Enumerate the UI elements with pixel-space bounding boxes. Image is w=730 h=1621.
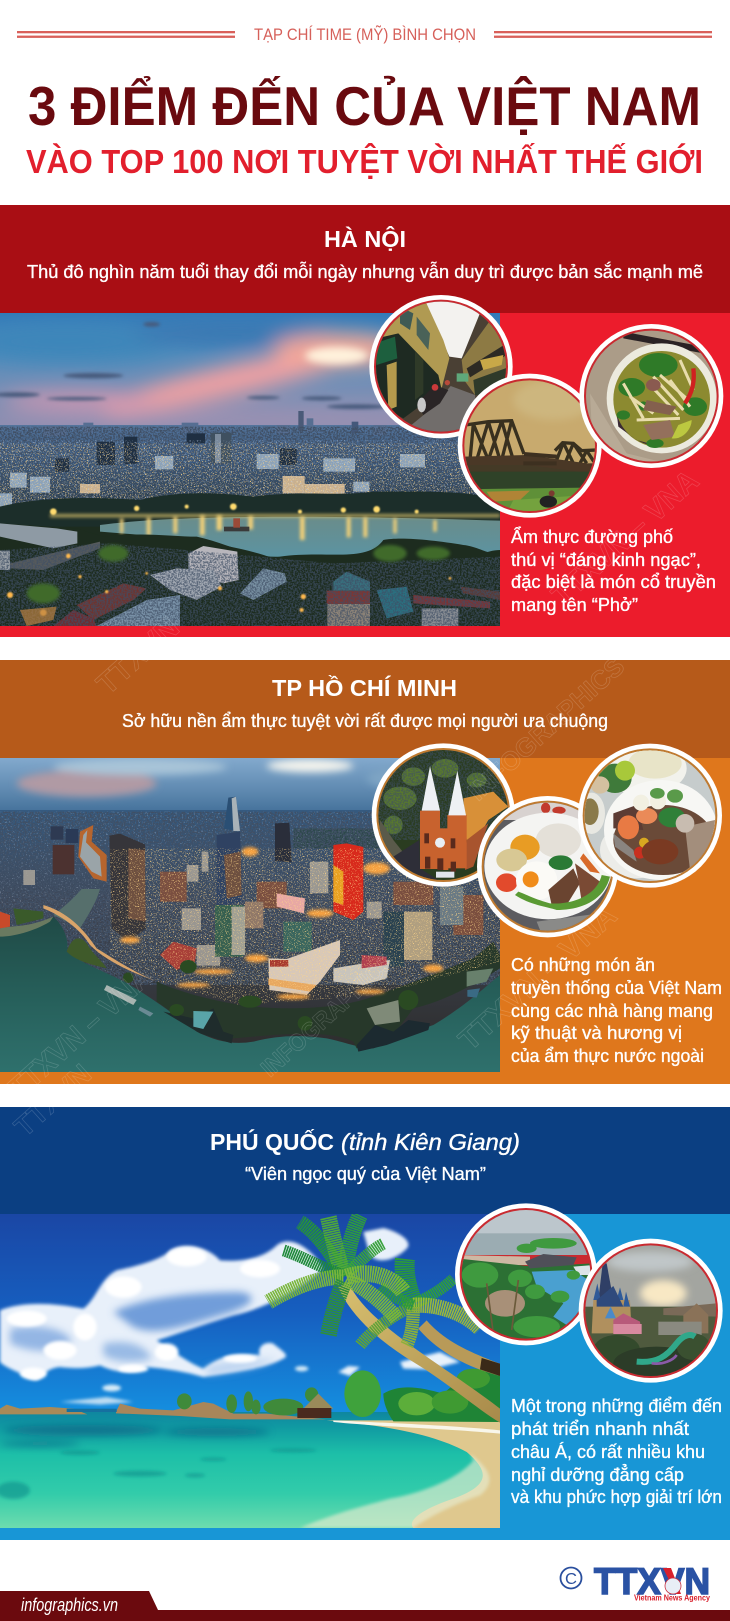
- body text: Phú Quốc description: [511, 1396, 722, 1507]
- tagline: TP Hồ Chí Minh: Sở hữu nền ẩm thực tuyệt vời rất được mọi người ưa chuộng: [122, 710, 608, 731]
- header band: Phú Quốc: [0, 1107, 730, 1214]
- panel: TP Hồ Chí Minh: [0, 660, 730, 1084]
- tagline: Hà Nội: Thủ đô nghìn năm tuổi thay đổi mỗi ngày nhưng vẫn duy trì được bản sắc mạnh mẽ: [27, 261, 703, 282]
- small islets trees: [177, 1387, 318, 1415]
- watermarks: TTXVN: [91, 611, 186, 701]
- distant rocks: [0, 1405, 87, 1414]
- circle photo: resort with pool: [455, 1203, 600, 1347]
- colonial hotel: [268, 940, 340, 995]
- red hotel tower: [333, 843, 363, 920]
- header band: TP Hồ Chí Minh: [0, 660, 730, 758]
- sea: [0, 1412, 500, 1529]
- watermarks: INFOGRAPHICS: [256, 949, 400, 1082]
- distant city: [0, 425, 500, 505]
- logo: TTXVN Vietnam News Agency: TTXVN: [594, 1561, 710, 1602]
- heading: TP Hồ Chí Minh: TP HỒ CHÍ MINH: [272, 674, 457, 701]
- body text: Hà Nội street food: [511, 526, 716, 615]
- footer bar with site name: [0, 1591, 730, 1621]
- watermarks: TTXVN – VNA: [453, 899, 623, 1057]
- body text: TP Hồ Chí Minh cuisine: kỹ thuật và hương vị: [511, 1023, 682, 1043]
- shore trees: [344, 1370, 381, 1417]
- circle photo: Notre-Dame cathedral Saigon: [370, 740, 520, 890]
- body text: Phú Quốc description: Một trong những điểm đến: [511, 1396, 722, 1416]
- watermarks: TTXVN – VNA: [3, 960, 158, 1105]
- circle photo: Long Bien bridge: [458, 374, 603, 520]
- side panel: TP Hồ Chí Minh: [0, 758, 730, 1084]
- photo: aerial Ho Chi Minh City skyline and river: [0, 755, 500, 1075]
- beach hut: [303, 1394, 333, 1409]
- body text: Hà Nội street food: thú vị “đáng kinh ngạc”,: [511, 549, 701, 570]
- watermarks: [3, 464, 705, 1142]
- heading: Phú Quốc: [210, 1128, 520, 1155]
- palm fronds: rear crown: [360, 1259, 480, 1345]
- body text: Hà Nội street food: mang tên “Phở”: [511, 594, 638, 615]
- watermarks: TTXVN – VNA: [546, 464, 705, 612]
- palm trunks: [418, 1320, 500, 1376]
- watermarks: TTXVN: [8, 1058, 97, 1142]
- city blocks: [23, 852, 382, 966]
- body text: Phú Quốc description: phát triển nhanh nhất: [511, 1419, 689, 1439]
- body text: TP Hồ Chí Minh cuisine: cùng các nhà hàng mang: [511, 1001, 713, 1021]
- beach: [327, 1420, 500, 1528]
- tagline: Phú Quốc: “Viên ngọc quý của Việt Nam”: [245, 1163, 486, 1184]
- circle photo: broken rice plate: [477, 795, 620, 938]
- circle photo: amusement park castle: [579, 1239, 723, 1383]
- body text: Phú Quốc description: và khu phức hợp giải trí lớn: [511, 1487, 722, 1507]
- circle photo: Hanoi old quarter street: [367, 293, 517, 443]
- water: [0, 917, 500, 1075]
- photo: Hanoi skyline at dusk over Hoan Kiem lake: [0, 310, 500, 630]
- heading: Hà Nội: HÀ NỘI: [324, 225, 406, 252]
- panel: Phú Quốc: [0, 1107, 730, 1540]
- circle photo: hu tieu noodle bowl: [577, 742, 723, 890]
- palm fronds: front crown: [268, 1215, 403, 1335]
- heading: Phú Quốc: PHÚ QUỐC: [210, 1128, 334, 1155]
- circle photo: bowl of pho: [579, 323, 727, 470]
- foreground: [17, 524, 488, 561]
- tall towers: [109, 834, 146, 942]
- side panel: Hà Nội: [0, 313, 730, 637]
- lake: [100, 517, 500, 561]
- tree line: [0, 492, 500, 527]
- body text: TP Hồ Chí Minh cuisine: [511, 955, 722, 1066]
- heading: Phú Quốc: (tỉnh Kiên Giang): [341, 1129, 520, 1155]
- street lights: [120, 847, 443, 999]
- waterfront: [157, 942, 500, 1048]
- body text: Hà Nội street food: Ẩm thực đường phố: [511, 526, 673, 547]
- logo: TTXVN Vietnam News Agency: C: [565, 1571, 577, 1588]
- riverside roads and park: [43, 905, 157, 982]
- clouds: [0, 1228, 460, 1405]
- side panel: Phú Quốc: [0, 1214, 730, 1540]
- kicker: magazine vote line: TẠP CHÍ TIME (MỸ) BÌNH CHỌN: [254, 25, 476, 44]
- footer bar with site name: infographics.vn: [21, 1595, 118, 1615]
- watermarks: INFOGRAPHICS: [462, 651, 630, 806]
- panel: Hà Nội: [0, 205, 730, 637]
- body text: TP Hồ Chí Minh cuisine: Có những món ăn: [511, 955, 655, 975]
- body text: Phú Quốc description: nghỉ dưỡng đẳng cấp: [511, 1464, 684, 1485]
- body text: TP Hồ Chí Minh cuisine: của ẩm thực nước ngoài: [511, 1046, 704, 1066]
- photo: tropical beach with palm trees: [0, 1212, 500, 1529]
- body text: Hà Nội street food: đặc biệt là món cổ truyền: [511, 571, 716, 592]
- header band: Hà Nội: [0, 205, 730, 313]
- body text: TP Hồ Chí Minh cuisine: truyền thống của Việt Nam: [511, 978, 722, 998]
- body text: Phú Quốc description: châu Á, có rất nhiều khu: [511, 1442, 705, 1462]
- logo: TTXVN Vietnam News Agency: Vietnam News Agency: [634, 1594, 710, 1602]
